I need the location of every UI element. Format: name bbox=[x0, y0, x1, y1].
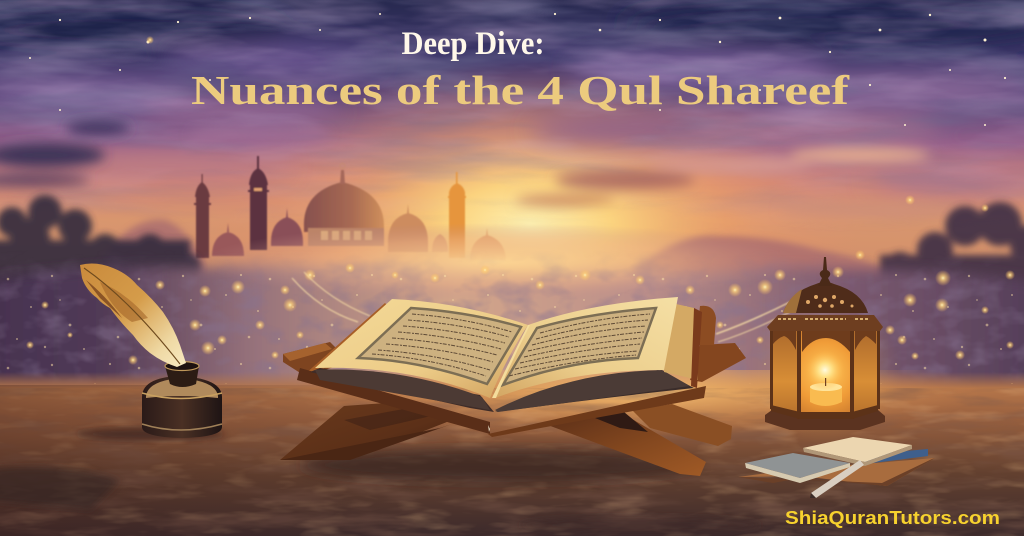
glass panels bbox=[771, 330, 798, 416]
title line 1: Deep Dive: bbox=[402, 26, 544, 62]
small dome second bbox=[271, 217, 303, 246]
right page block bbox=[664, 302, 698, 380]
midground: hazy woodland bbox=[0, 226, 1024, 387]
frame bbox=[770, 329, 880, 419]
lantern bbox=[750, 257, 900, 445]
roof bbox=[767, 315, 883, 331]
shadow under lectern bbox=[300, 448, 700, 482]
ink pot bbox=[142, 362, 222, 438]
main dome bbox=[304, 182, 384, 232]
tree line right bbox=[880, 202, 1024, 315]
shadow bbox=[75, 428, 225, 440]
back left arm bbox=[283, 342, 350, 376]
lantern glow bbox=[750, 295, 900, 445]
stars in upper sky bbox=[29, 13, 1006, 126]
dome far right bbox=[470, 235, 506, 260]
left leg bbox=[280, 402, 452, 460]
cross boards bbox=[297, 368, 490, 434]
ground bbox=[0, 370, 1024, 536]
paper bbox=[738, 458, 935, 486]
pen bbox=[811, 460, 864, 498]
finial bbox=[818, 257, 832, 286]
arches bbox=[773, 330, 876, 352]
feather bbox=[80, 264, 186, 367]
glowing sparkles bbox=[26, 36, 1015, 365]
dome bbox=[783, 282, 868, 313]
title line 2: Nuances of the 4 Qul Shareef bbox=[191, 67, 851, 113]
open book bbox=[310, 297, 702, 412]
website credit: ShiaQuranTutors.com bbox=[785, 508, 1000, 528]
right leg back bbox=[632, 404, 732, 446]
base bbox=[765, 410, 885, 430]
right page bbox=[495, 297, 678, 398]
tree line left bbox=[0, 195, 201, 310]
left page text panel bbox=[358, 308, 521, 384]
small dome left bbox=[212, 232, 244, 256]
right leg bbox=[545, 412, 706, 476]
lectern (rehal) bbox=[280, 303, 746, 476]
side rail left bbox=[304, 303, 388, 380]
minaret: second bbox=[248, 156, 269, 250]
book block dark edges bbox=[310, 368, 494, 412]
blue pen bbox=[860, 449, 928, 464]
candle bbox=[810, 383, 842, 406]
book spine bbox=[492, 325, 530, 398]
dome right bbox=[388, 213, 428, 252]
mosque skyline bbox=[194, 156, 506, 260]
light trails bbox=[292, 272, 790, 342]
grey notebook bbox=[745, 453, 850, 478]
clouds bbox=[0, 0, 1024, 240]
left page bbox=[315, 299, 528, 398]
back right arm bbox=[690, 343, 746, 382]
minaret: right bbox=[448, 172, 466, 258]
notebooks and pen bbox=[738, 437, 935, 498]
distant hills bbox=[100, 220, 895, 300]
quill and ink pot bbox=[75, 264, 225, 440]
cream notebook bbox=[803, 437, 912, 462]
minaret: far left bbox=[194, 174, 211, 258]
right page text panel bbox=[503, 308, 656, 385]
title bbox=[191, 26, 851, 113]
background: evening sky bbox=[0, 0, 1024, 400]
